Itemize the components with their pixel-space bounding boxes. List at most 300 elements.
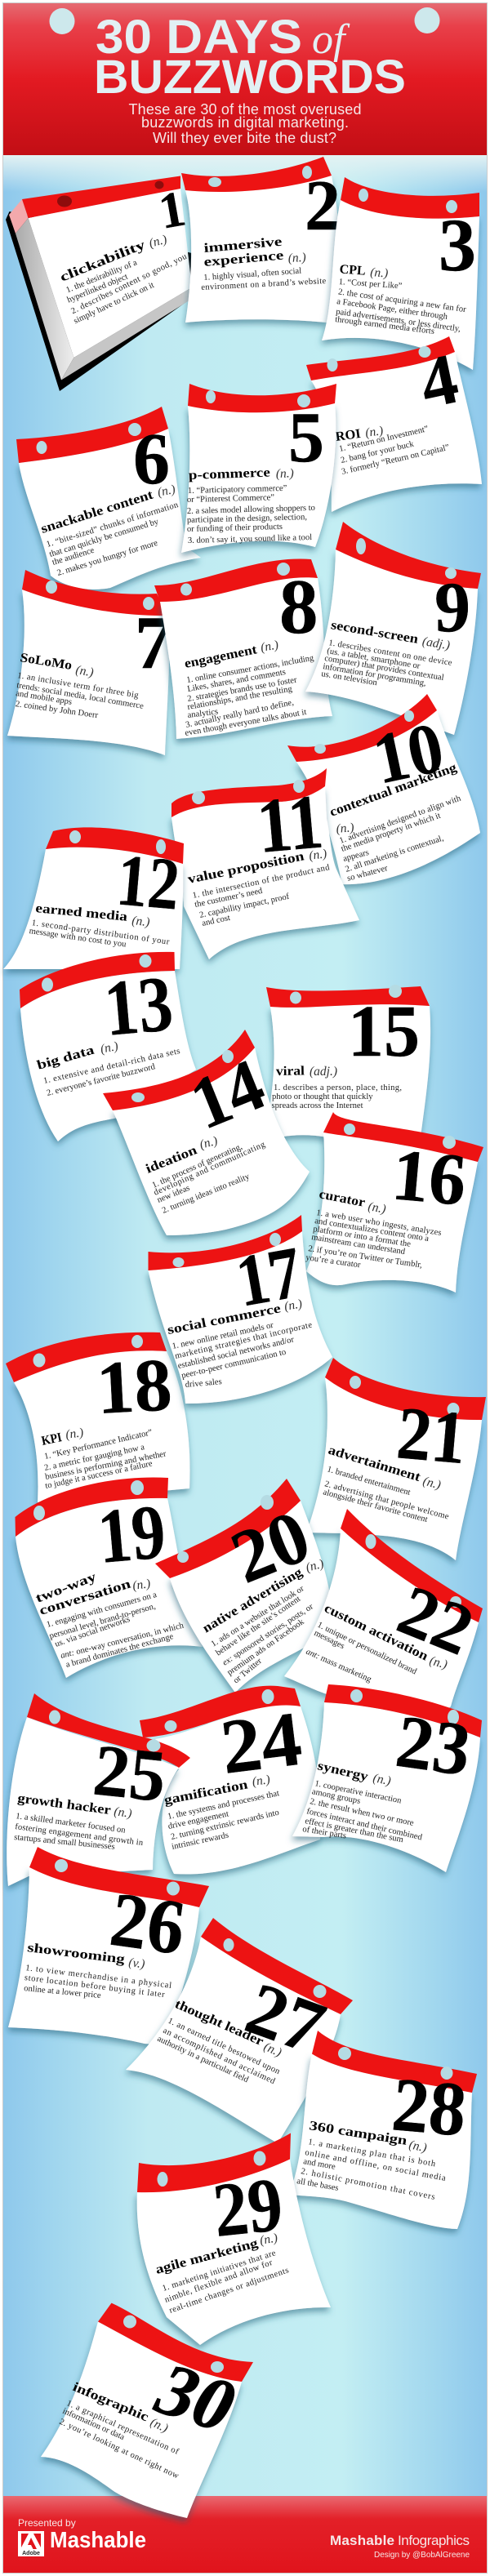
term (58, 233, 168, 285)
term: snackable content (39, 487, 155, 536)
term: thought leader (172, 1997, 265, 2049)
definition (185, 654, 315, 738)
definition: effect is greater than the sum (304, 1817, 404, 1844)
red band (312, 2031, 477, 2093)
term (316, 1759, 392, 1788)
term (328, 761, 458, 836)
term (167, 1297, 303, 1337)
red band (98, 2303, 253, 2382)
holes (69, 830, 166, 854)
red band (266, 986, 430, 1008)
term (40, 1426, 84, 1448)
term: (n.) (148, 233, 168, 251)
definition: all the bases (296, 2177, 339, 2193)
red band (154, 559, 318, 602)
definition (296, 2138, 447, 2202)
title (94, 11, 406, 104)
definition: 3. formerly “Return on Capital” (341, 443, 451, 477)
definition: fostering engagement and growth in (15, 1822, 144, 1848)
number: 20 (220, 1494, 321, 1599)
definition: 2. turning ideas into reality (161, 1172, 252, 1216)
definition: and cost (201, 914, 231, 928)
definition: 1. online consumer actions, including (186, 654, 315, 685)
definition: 1. a web user who ingests, analyzes (316, 1208, 442, 1238)
term (330, 618, 451, 652)
holes (290, 985, 402, 1004)
definition: trends: social media, local commerce (16, 681, 145, 711)
pad side pink (9, 199, 29, 234)
title: 30 DAYS (96, 11, 302, 64)
definition: 1. the desirability of a (65, 258, 139, 295)
term: KPI (40, 1430, 63, 1448)
paper sheet (185, 176, 339, 323)
page 1: clickability tear-off calendar pad (6, 176, 192, 391)
definition: 2. holistic promotion that covers (300, 2167, 435, 2202)
definition: 1. cooperative interaction (314, 1779, 403, 1806)
red band (172, 768, 327, 817)
number: 30 (140, 2349, 252, 2447)
term (19, 651, 95, 679)
credits (330, 2533, 470, 2560)
definition: you’re a curator (305, 1253, 362, 1270)
definition: 1. ads on a website that look or (210, 1584, 306, 1649)
definition: 2. turning extrinsic rewards into (170, 1809, 280, 1842)
paper sheet (306, 1132, 478, 1292)
term: (n.) (367, 1199, 387, 1217)
page 16: curator (305, 1112, 483, 1292)
page 28: 360 campaign (288, 2031, 477, 2229)
definition: 1. marketing initiatives that are (162, 2249, 277, 2293)
term: experience (203, 249, 284, 269)
definition: 1. second-party distribution of your (31, 919, 170, 947)
definition: forces interact and their combined (305, 1807, 423, 1843)
term: (n.) (131, 1577, 151, 1593)
definition (167, 1789, 280, 1852)
definition: that can quickly be consumed by (48, 517, 160, 559)
number: 12 (114, 839, 183, 926)
number: 10 (367, 708, 450, 800)
definition: mainstream can understand (311, 1233, 406, 1257)
number: 8 (279, 563, 318, 650)
term: (n.) (148, 2415, 170, 2436)
definition: 1. highly visual, often social (203, 267, 302, 283)
paper sheet (181, 403, 336, 553)
number: 17 (230, 1232, 307, 1323)
definition: through earned media efforts (335, 315, 435, 336)
definition: 1. the intersection of the product and (192, 863, 331, 901)
term (318, 1187, 387, 1217)
term: CPL (339, 263, 366, 278)
term: (n.) (131, 914, 150, 929)
number: 14 (180, 1044, 275, 1146)
red band (27, 1693, 190, 1768)
definition: 1. “Participatory commerce” (188, 484, 287, 496)
term (186, 847, 327, 887)
holes (356, 538, 457, 579)
term (335, 424, 384, 444)
red band (336, 522, 481, 589)
definition: among groups (311, 1787, 361, 1806)
page 8: engagement (154, 559, 332, 739)
definition: peer-to-peer communication to (180, 1348, 287, 1381)
paper sheet (292, 1702, 480, 1872)
holes (157, 2151, 266, 2187)
term: (n.) (421, 1474, 443, 1493)
page 21: advertainment (306, 1358, 486, 1560)
holes (344, 1123, 456, 1149)
number: 11 (254, 777, 327, 870)
definition: 2. a metric for gauging how a (43, 1443, 145, 1473)
number: 1 (155, 180, 189, 240)
definition (305, 1208, 442, 1270)
definition: of their parts (302, 1825, 347, 1840)
definition: 2. all marketing is contextual, (345, 834, 445, 874)
pad side grey (16, 218, 74, 380)
red band (306, 336, 455, 380)
definition (187, 484, 315, 545)
definition: 1. new online retail models or (172, 1321, 274, 1351)
term: (n.) (260, 638, 279, 655)
paper sheet (172, 786, 359, 959)
term: (n.) (305, 1557, 325, 1575)
definition: nimble, flexible and allow for (163, 2258, 274, 2305)
paper sheet (305, 549, 478, 735)
definition: 2. makes you hungry for more (56, 539, 159, 578)
holes (173, 1233, 281, 1267)
term: (n.) (370, 265, 389, 281)
definition: the audience (51, 546, 96, 567)
definition: 2. if you’re on Twitter or Tumblr, (308, 1244, 423, 1270)
definition: drive engagement (167, 1809, 229, 1831)
paper sheet (8, 1867, 199, 2045)
definition: 1. a skilled marketer focused on (16, 1812, 127, 1835)
red band (137, 2133, 291, 2192)
term (183, 638, 279, 671)
holes (192, 780, 305, 804)
term: 360 campaign (308, 2119, 408, 2148)
term: (adj.) (421, 634, 451, 652)
page 14: ideation (103, 1030, 310, 1235)
definition: 3. actually really hard to define, (185, 698, 295, 730)
definition (192, 863, 331, 928)
red band (325, 1358, 486, 1420)
definition: paid advertisements, or less directly, (336, 308, 461, 334)
definition: behave like the site’s content (215, 1595, 302, 1657)
red band (103, 1030, 255, 1110)
definition: 1. engaging with consumers on a (46, 1591, 158, 1630)
definition: the customer’s need (194, 887, 264, 910)
paper sheet (19, 429, 201, 589)
term: conversation (38, 1577, 132, 1618)
term: earned media (35, 901, 128, 924)
red band (188, 384, 336, 412)
term: big data (35, 1043, 96, 1073)
definition: simply have to click on it (73, 281, 156, 326)
definition: platform or into a format the (313, 1225, 412, 1249)
definition: and mobile apps (16, 689, 73, 707)
red band (6, 1332, 167, 1382)
term (203, 235, 306, 269)
term: (v.) (128, 1955, 145, 1971)
number: 7 (135, 601, 172, 684)
term: (n.) (252, 1773, 271, 1789)
definition: to judge it a success or a failure (44, 1459, 154, 1491)
definition: 1. unique or personalized brand (316, 1621, 418, 1677)
definition: 1. describes a person, place, thing, (274, 1083, 402, 1092)
holes (338, 2047, 452, 2080)
number: 13 (101, 959, 176, 1052)
page 29: agile marketing (137, 2133, 331, 2345)
subtitle: These are 30 of the most overused (129, 101, 361, 118)
page 4: ROI (306, 336, 482, 512)
definition: or “Pinterest Commerce” (187, 493, 274, 505)
definition: 2. a sales model allowing shoppers to (187, 504, 315, 516)
definition: 2. the cost of acquiring a new fan for (337, 287, 467, 314)
definition: 1. “Return on Investment” (338, 425, 430, 454)
term: p-commerce (189, 466, 270, 483)
holes (33, 1335, 143, 1367)
definition: established social networks and/or (177, 1335, 296, 1371)
definition: computer) that provides contextual (324, 654, 444, 683)
definition: hyperlinked object (66, 273, 129, 305)
definition: appears (342, 848, 370, 864)
term: ideation (144, 1143, 199, 1177)
Mashable logo: Mashable (50, 2527, 146, 2552)
definition (46, 501, 180, 578)
definition: online and offline, on social media (304, 2148, 447, 2183)
paper sheet (41, 2322, 242, 2518)
term (327, 1444, 443, 1493)
definition: new ideas (156, 1184, 191, 1205)
number: 29 (209, 2162, 287, 2253)
holes (123, 2316, 224, 2373)
holes (165, 1689, 274, 1732)
header hole left (49, 8, 75, 34)
definition (172, 1320, 314, 1390)
term: gamification (163, 1777, 249, 1808)
definition: or funding of their products (187, 523, 283, 534)
paper sheet (155, 1705, 321, 1875)
definition: personal level, brand-to-person, (48, 1602, 157, 1641)
term: (n.) (113, 1804, 133, 1821)
red band (140, 1686, 301, 1737)
page 10: contextual marketing (287, 694, 480, 884)
red band (22, 176, 180, 218)
definition: intrinsic rewards (171, 1831, 229, 1852)
paper sheet (306, 1377, 482, 1560)
holes (36, 423, 141, 454)
definition (15, 671, 145, 720)
header banner (3, 3, 487, 155)
term: showrooming (27, 1941, 126, 1967)
term: (n.) (261, 2040, 283, 2060)
definition: and contextualizes content onto a (314, 1217, 430, 1244)
term (39, 483, 176, 536)
definition: 1. extensive and detail-rich data sets (42, 1047, 181, 1086)
term (154, 2231, 278, 2277)
number: 3 (439, 203, 476, 287)
number: 15 (348, 991, 420, 1072)
definition: 1. advertising designed to align with (338, 794, 462, 846)
definition: alongside their favorite content (322, 1488, 429, 1524)
page 15: viral (263, 985, 430, 1143)
definition (201, 267, 327, 292)
definition (271, 1083, 402, 1110)
term (339, 263, 389, 281)
red band (46, 827, 184, 864)
definition: ant: one-way conversation, in which (60, 1622, 185, 1661)
term (144, 1134, 219, 1177)
definition: an accomplished and acclaimed (162, 2027, 277, 2086)
term: value proposition (186, 849, 305, 887)
term: infographic (70, 2380, 150, 2424)
definition (322, 1465, 450, 1524)
definition: 1. a marketing plan that is both (307, 2138, 437, 2169)
definition: photo or thought that quickly (272, 1092, 373, 1101)
term (308, 2119, 428, 2155)
term (322, 1601, 449, 1672)
number: 21 (394, 1390, 470, 1479)
holes (366, 1534, 461, 1608)
definition: message with no cost to you (29, 927, 127, 950)
definition: 1. describes content on one device (328, 638, 453, 668)
term: second-screen (330, 618, 419, 647)
term: (n.) (428, 1653, 449, 1672)
definition: ex: sponsored stories, posts, or (221, 1602, 315, 1668)
definition: 1. branded entertainment (326, 1465, 412, 1497)
term: agile marketing (154, 2236, 260, 2277)
definition: 1. the systems and processes that (167, 1789, 280, 1822)
definition: environment on a brand’s website (201, 277, 327, 292)
holes (206, 390, 310, 407)
definition: 1. “bite-sized” chunks of information (46, 501, 180, 549)
term: (n.) (287, 251, 306, 265)
paper sheet (113, 1048, 310, 1235)
number: 18 (95, 1342, 174, 1430)
term: growth hacker (16, 1791, 112, 1817)
definition: information for programming, (323, 662, 427, 688)
number: 16 (389, 1134, 470, 1221)
term: social commerce (167, 1301, 282, 1337)
term: (n.) (308, 847, 327, 863)
number: 22 (388, 1571, 483, 1671)
term: (n.) (336, 821, 354, 836)
definition: marketing strategies that incorporate (174, 1320, 314, 1361)
holes (224, 1938, 327, 1998)
definition: developing and communicating (153, 1140, 267, 1198)
title: BUZZWORDS (94, 51, 406, 104)
term (163, 1773, 271, 1808)
red band (149, 1215, 302, 1270)
red band (341, 1509, 483, 1622)
term (172, 1997, 283, 2060)
term: (n.) (372, 1771, 392, 1788)
definition: 2. the result when two or more (309, 1797, 415, 1828)
page 9: second-screen (305, 522, 481, 735)
holes (327, 346, 431, 371)
footer banner (3, 2496, 487, 2573)
definition: participate in the design, selection, (187, 513, 307, 525)
page 6: snackable content (16, 407, 201, 589)
term: (n.) (99, 1039, 119, 1057)
definition: 2. strategies brands use to foster (187, 675, 298, 704)
definition: 2. you’re looking at one right now (58, 2418, 180, 2480)
definition: so whatever (346, 864, 389, 883)
term: (adj.) (310, 1065, 337, 1079)
holes (350, 1689, 459, 1724)
page 5: p-commerce (181, 384, 336, 553)
paper sheet (7, 589, 169, 755)
definition: startups and small businesses (14, 1833, 115, 1852)
number: 4 (413, 340, 465, 425)
term: SoLoMo (19, 651, 73, 673)
definition: Likes, shares, and comments (187, 668, 287, 694)
credits: Mashable (330, 2533, 394, 2548)
term: native advertising (200, 1565, 305, 1635)
icon: Adobe logo: Adobe (22, 2551, 40, 2556)
definition: 1. to view merchandise in a physical (25, 1964, 172, 1991)
definition: 1. an inclusive term for three big (17, 671, 140, 701)
term (33, 1570, 151, 1618)
red band (20, 952, 175, 1008)
number: 26 (105, 1875, 190, 1971)
red band (15, 1477, 168, 1537)
definition: 1. the process of generating, (151, 1142, 243, 1190)
definition: 2. advertising that people welcome (323, 1479, 450, 1522)
term: (n.) (198, 1134, 219, 1152)
paper sheet (7, 1717, 179, 1886)
page 17: social commerce (149, 1215, 332, 1404)
page 22: custom activation (284, 1509, 483, 1715)
paper sheet (16, 1498, 203, 1678)
red band (324, 1684, 482, 1737)
definition: 1. “Cost per Like” (338, 278, 403, 291)
definition: 3. don’t say it, you sound like a tool (188, 533, 312, 545)
holes (314, 710, 414, 754)
term: immersive (203, 235, 283, 256)
term: advertainment (327, 1444, 422, 1484)
number: 23 (391, 1699, 476, 1791)
definition (335, 278, 467, 336)
term: (n.) (283, 1297, 303, 1314)
definition: ant: mass marketing (305, 1648, 373, 1684)
red band (287, 694, 437, 762)
number: 28 (389, 2062, 470, 2153)
number: 19 (95, 1488, 169, 1580)
credits: Infographics (398, 2533, 470, 2548)
paper sheet (263, 1004, 430, 1143)
term: ROI (335, 427, 362, 444)
definition (321, 638, 453, 688)
term: (n.) (259, 2231, 278, 2248)
page 26: showrooming (8, 1847, 209, 2045)
page 18: KPI (6, 1332, 190, 1502)
red band (201, 1918, 353, 2014)
paper sheet (14, 1350, 190, 1502)
paper sheet (284, 1528, 479, 1715)
definition: authority in a particular field (156, 2035, 250, 2084)
presented by: Presented by (18, 2517, 76, 2529)
definition: a brand dominates the exchange (65, 1632, 175, 1670)
definition: spreads across the Internet (271, 1101, 363, 1110)
term: clickability (58, 238, 147, 285)
definition (210, 1584, 315, 1685)
paper sheet (288, 2054, 472, 2229)
holes (33, 1480, 144, 1520)
credits: Design by @BobAlGreene (374, 2551, 470, 2560)
subtitle: buzzwords in digital marketing. (141, 114, 349, 131)
holes (177, 1495, 274, 1563)
